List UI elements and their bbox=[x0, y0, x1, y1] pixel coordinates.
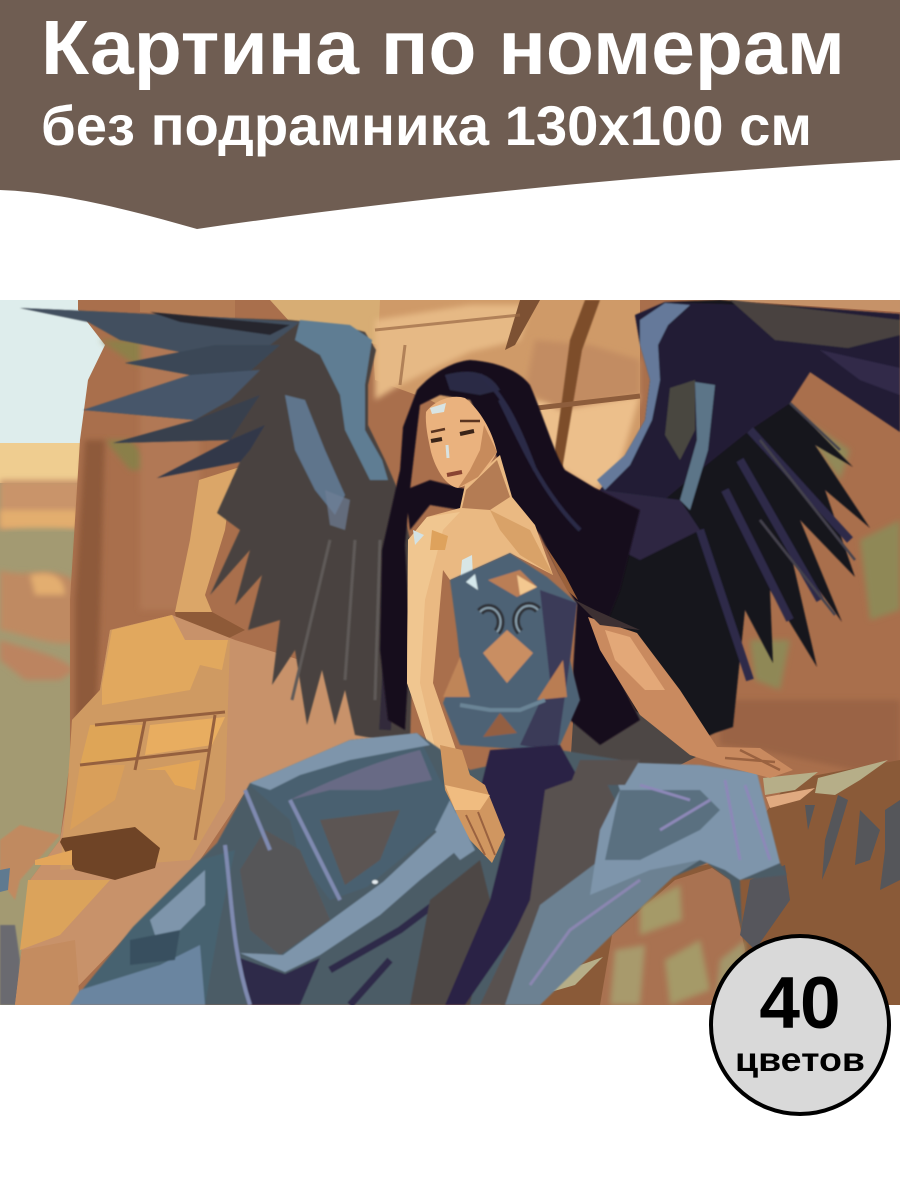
subtitle: без подрамника 130х100 см bbox=[41, 94, 812, 157]
header banner bbox=[0, 0, 900, 229]
badge: 40 colours bbox=[711, 936, 889, 1114]
left hand on knee bbox=[440, 745, 505, 863]
bodice with cut-outs bbox=[443, 553, 580, 752]
grey shadow beneath right arm bbox=[571, 710, 696, 765]
badge number: 40 bbox=[759, 963, 841, 1044]
golden stone blocks lower left bbox=[15, 615, 400, 1005]
left wing bbox=[20, 308, 415, 745]
face bbox=[426, 397, 497, 488]
right wing bbox=[596, 300, 900, 736]
sandstone cliff bbox=[15, 300, 900, 1005]
sky and distant landscape bbox=[0, 300, 105, 1005]
flowing hair bbox=[380, 360, 640, 745]
rock ledge under the figure bbox=[500, 760, 900, 1005]
badge label: цветов bbox=[735, 1041, 865, 1078]
skin: neck shoulders and arms bbox=[407, 455, 578, 750]
painting: angel with dark wings bbox=[0, 300, 900, 1005]
flowing gown bbox=[70, 733, 787, 1005]
title: Картина по номерам bbox=[41, 5, 845, 91]
right arm and hand bbox=[575, 600, 793, 778]
